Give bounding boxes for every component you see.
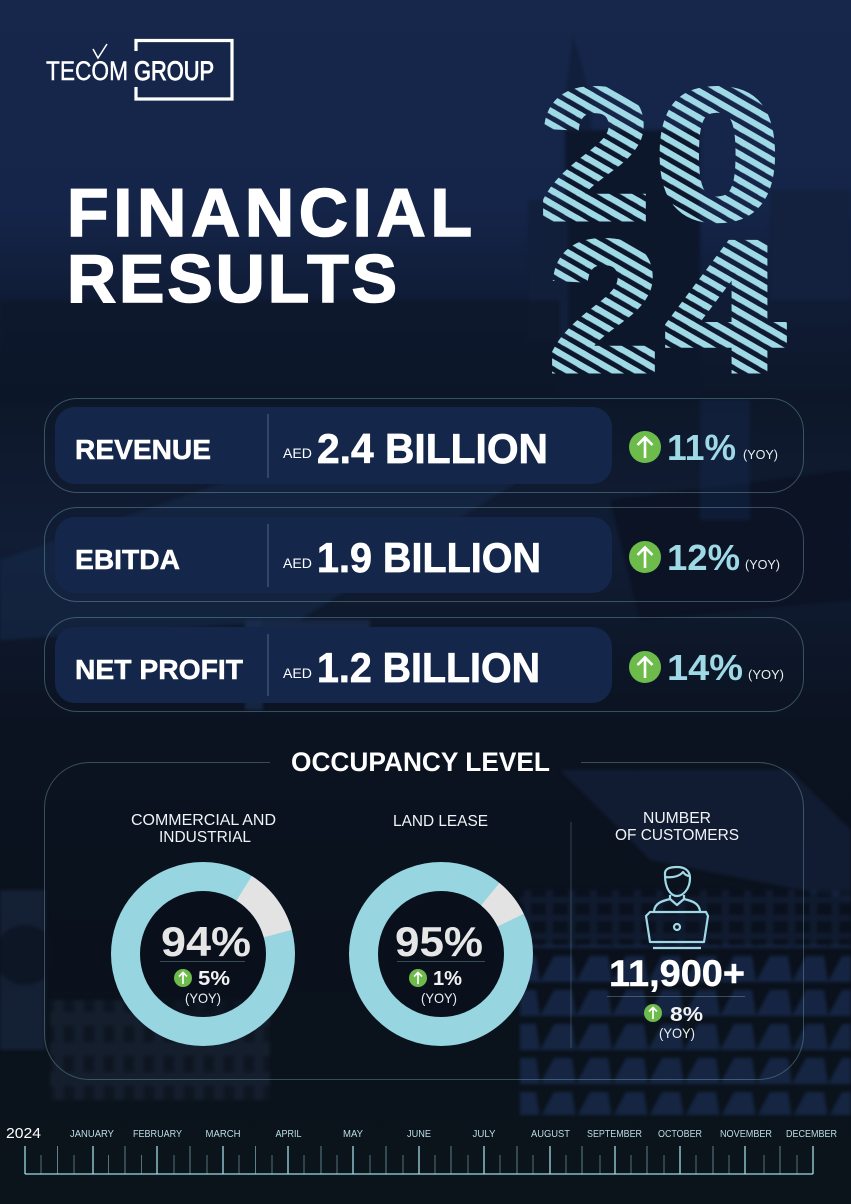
number of customers label: NUMBER — [643, 810, 711, 827]
striped year: 2024: 2 — [540, 51, 650, 257]
title: Financial Results: FINANCIAL — [67, 175, 472, 251]
logo: TECOM Group: TECOM — [46, 56, 128, 86]
month labels: JANUARY — [70, 1129, 114, 1140]
panel: revenue — [44, 398, 804, 492]
month labels: OCTOBER — [658, 1129, 702, 1140]
panel: net profit: 14% — [667, 647, 743, 688]
month labels: DECEMBER — [786, 1129, 837, 1140]
striped year: 2024: 2 — [549, 203, 659, 409]
month labels: NOVEMBER — [720, 1129, 772, 1140]
customers stat: (YOY) — [659, 1025, 695, 1041]
panel: revenue: AED — [283, 445, 312, 461]
icon: person at laptop — [646, 867, 708, 948]
donut: commercial and industrial 94% — [126, 876, 280, 1032]
title: Financial Results: RESULTS — [67, 241, 397, 317]
donut: commercial and industrial 94%: 5% — [198, 968, 230, 990]
customers stat: 11,900+ — [609, 953, 745, 994]
panel: net profit: (YOY) — [748, 667, 784, 682]
timeline: 2024 months: 2024 — [6, 1125, 41, 1142]
logo: TECOM Group: GROUP — [134, 56, 214, 86]
donut: commercial and industrial 94%: (YOY) — [185, 990, 221, 1006]
striped year: 2024: 0 — [655, 51, 780, 257]
panel: occupancy level — [44, 747, 804, 1080]
donut: land lease 95%: 95% — [395, 918, 483, 965]
land lease label: LAND LEASE — [393, 813, 488, 830]
panel: EBITDA: (YOY) — [745, 557, 780, 572]
striped year: 2024: 4 — [666, 203, 784, 409]
month labels: AUGUST — [531, 1129, 570, 1140]
heading: occupancy level: OCCUPANCY LEVEL — [291, 747, 550, 777]
panel: net profit: AED — [283, 665, 312, 681]
logo: TECOM Group — [46, 40, 232, 99]
month labels: MARCH — [206, 1129, 240, 1140]
panel: revenue: 2.4 BILLION — [317, 425, 548, 472]
commercial and industrial label: INDUSTRIAL — [159, 829, 251, 846]
month labels: SEPTEMBER — [587, 1129, 642, 1140]
donut: land lease 95%: 1% — [433, 968, 462, 990]
month labels: MAY — [343, 1129, 363, 1140]
panel: EBITDA — [44, 508, 804, 602]
donut: land lease 95% — [364, 876, 518, 1032]
timeline: 2024 months — [6, 1125, 837, 1174]
ruler — [25, 1146, 813, 1174]
title: Financial Results — [67, 175, 472, 317]
number of customers label: OF CUSTOMERS — [615, 827, 739, 844]
number of customers label — [615, 810, 739, 844]
panel: revenue: (YOY) — [743, 447, 778, 462]
panel: EBITDA: AED — [283, 555, 312, 571]
commercial and industrial label: COMMERCIAL AND — [131, 812, 276, 829]
panel: revenue: REVENUE — [75, 434, 211, 465]
striped year: 2024 — [540, 51, 784, 409]
panel: EBITDA: EBITDA — [75, 544, 180, 575]
month labels: FEBRUARY — [133, 1129, 182, 1140]
panel: EBITDA: 12% — [667, 537, 740, 578]
month labels: JUNE — [407, 1129, 431, 1140]
panel: revenue: 11% — [667, 427, 736, 468]
month labels — [70, 1129, 837, 1140]
month labels: APRIL — [276, 1129, 302, 1140]
donut: land lease 95%: (YOY) — [421, 990, 457, 1006]
panel: net profit: 1.2 BILLION — [317, 644, 540, 691]
month labels: JULY — [472, 1129, 496, 1140]
donut: commercial and industrial 94%: 94% — [161, 918, 251, 965]
customers stat — [607, 953, 745, 1041]
commercial and industrial label — [131, 812, 276, 846]
panel: net profit — [44, 618, 804, 712]
panel: net profit: NET PROFIT — [75, 654, 243, 685]
customers stat: 8% — [670, 1004, 703, 1026]
panel: EBITDA: 1.9 BILLION — [317, 534, 541, 581]
